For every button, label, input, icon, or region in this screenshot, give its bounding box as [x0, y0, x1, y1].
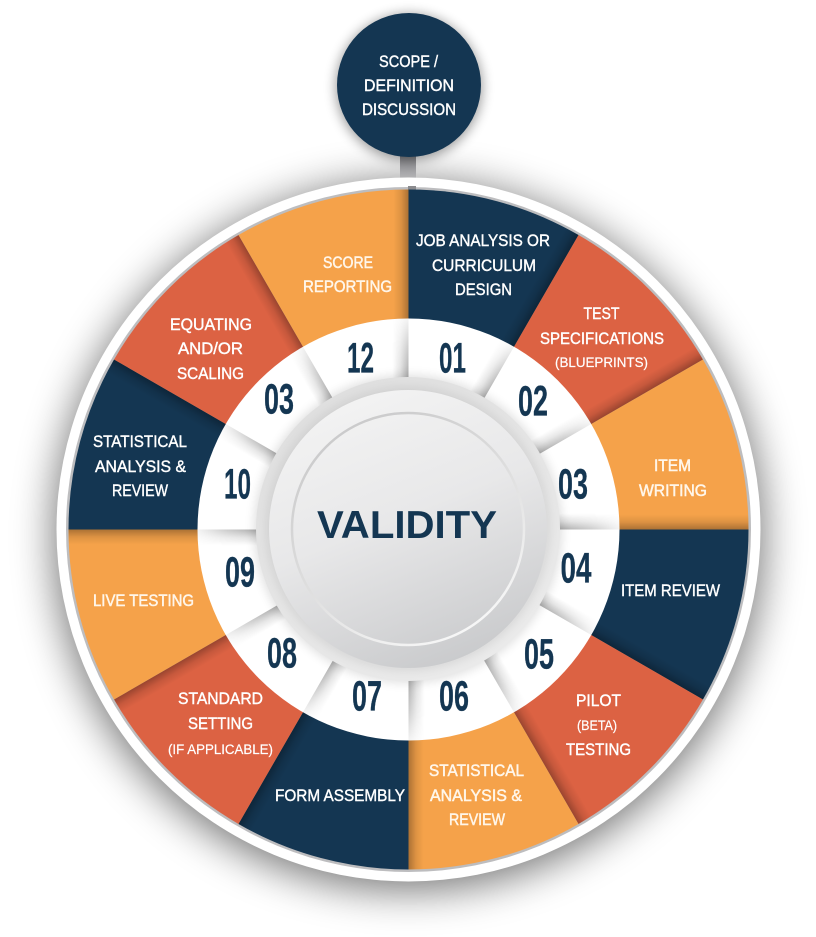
sector 09 — [68, 530, 408, 700]
label: score reporting: SCORE — [323, 254, 373, 272]
wheel white outer ring — [56, 178, 760, 882]
top circle disc — [337, 13, 481, 157]
label: statistical analysis and review upper — [93, 433, 187, 500]
label: equating and/or scaling: SCALING — [177, 365, 244, 383]
sector 12 — [238, 190, 408, 530]
hub inner groove — [292, 413, 524, 645]
label: statistical analysis and review lower — [429, 762, 524, 829]
number 05: 05 — [524, 630, 554, 678]
sector 02 — [408, 235, 703, 530]
sector 11 — [114, 235, 408, 530]
label: item writing: WRITING — [639, 482, 707, 500]
label: test specifications: SPECIFICATIONS — [540, 330, 664, 348]
label: job analysis or curriculum design: CURRICULUM — [432, 257, 536, 275]
number 03 left: 03 — [264, 376, 294, 424]
label: score reporting: REPORTING — [303, 278, 392, 296]
number 01: 01 — [439, 334, 466, 382]
sector 10 — [68, 360, 408, 530]
label: standard setting: (IF APPLICABLE) — [168, 742, 273, 757]
label: pilot beta testing — [566, 692, 631, 759]
top circle label: DISCUSSION — [362, 101, 456, 119]
number 09: 09 — [225, 548, 255, 596]
label: pilot beta testing: (BETA) — [577, 718, 617, 733]
label: pilot beta testing: TESTING — [566, 741, 631, 759]
connector stem — [400, 150, 416, 186]
hub shadow — [254, 375, 562, 683]
label: equating and/or scaling — [170, 316, 252, 383]
label: item review: ITEM REVIEW — [621, 582, 720, 600]
hub title: VALIDITY — [317, 504, 497, 547]
sector 03 — [408, 360, 748, 530]
label: live testing: LIVE TESTING — [93, 592, 194, 610]
top circle shadow — [336, 14, 482, 160]
sector labels — [93, 232, 720, 829]
label: form assembly: FORM ASSEMBLY — [275, 787, 405, 805]
label: score reporting — [303, 254, 392, 296]
label: test specifications — [540, 305, 664, 370]
hub disc shadow — [267, 388, 549, 670]
step numbers — [224, 334, 592, 720]
label: item writing — [639, 457, 707, 500]
number 08: 08 — [267, 630, 297, 678]
central hub — [254, 375, 562, 683]
number 06: 06 — [439, 672, 469, 720]
label: statistical analysis and review upper: REVIEW — [112, 482, 168, 500]
label: statistical analysis and review upper: STATISTICAL — [93, 433, 187, 451]
hub disc — [269, 390, 547, 668]
label: standard setting — [168, 690, 273, 757]
label: statistical analysis and review lower: ANALYSIS & — [430, 787, 522, 805]
number 03 right: 03 — [558, 460, 588, 508]
label: job analysis or curriculum design: DESIGN — [455, 281, 512, 299]
number 12: 12 — [347, 334, 374, 382]
label: statistical analysis and review lower: REVIEW — [449, 811, 505, 829]
hub outer band — [256, 377, 560, 681]
label: pilot beta testing: PILOT — [576, 692, 621, 710]
top circle label: SCOPE / — [379, 53, 438, 71]
sector 05 — [408, 530, 703, 824]
wheel outer drop shadow — [54, 182, 762, 890]
label: standard setting: SETTING — [188, 715, 253, 733]
white number ring — [198, 318, 620, 740]
sector 01 — [408, 189, 578, 530]
number 04: 04 — [560, 544, 592, 592]
sector 06 — [408, 530, 578, 870]
label: equating and/or scaling: AND/OR — [178, 340, 243, 358]
number 07: 07 — [352, 672, 382, 720]
label: job analysis or curriculum design: JOB ANALYSIS OR — [416, 232, 550, 250]
label: statistical analysis and review lower: STATISTICAL — [429, 762, 524, 780]
number 02: 02 — [518, 378, 548, 426]
sector 07 — [238, 530, 408, 870]
sector 08 — [114, 530, 408, 824]
sector 04 — [408, 530, 748, 700]
label: test specifications: (BLUEPRINTS) — [555, 355, 648, 370]
label: test specifications: TEST — [584, 305, 620, 323]
label: item writing: ITEM — [654, 457, 691, 475]
top circle label — [362, 53, 456, 119]
label: job analysis or curriculum design — [416, 232, 550, 299]
label: statistical analysis and review upper: ANALYSIS & — [95, 458, 186, 476]
colored sector ring — [64, 184, 754, 874]
number 10: 10 — [224, 460, 251, 508]
top circle: scope / definition discussion — [336, 13, 482, 160]
label: equating and/or scaling: EQUATING — [170, 316, 252, 334]
top circle label: DEFINITION — [364, 77, 454, 95]
label: standard setting: STANDARD — [178, 690, 263, 708]
